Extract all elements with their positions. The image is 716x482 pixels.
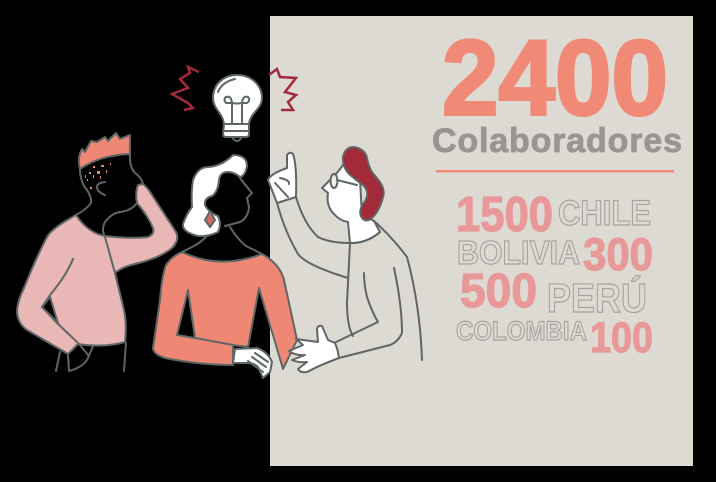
hair [79,133,130,169]
Bolivia count: 300 [583,229,653,280]
Peru label: PERÚ [547,275,647,321]
Chile count: 1500 [456,188,553,242]
hair [343,147,384,220]
fingers [248,353,268,372]
head outline [76,154,143,215]
figure: woman with hair [153,155,297,378]
Colombia label: COLOMBIA [456,316,587,346]
head and neck [322,165,380,243]
open hand [289,326,339,372]
heading rule [436,170,674,172]
total number: 2400 [442,18,668,138]
panel: stats background [270,16,693,466]
hand [233,348,272,378]
stubble dots [85,163,111,189]
arm folds [42,203,137,343]
face and neck [182,178,262,254]
hair [183,155,247,236]
total label: Colaboradores [432,122,682,160]
earring [205,211,215,227]
sleeve line [195,338,233,345]
raised hand [268,153,296,203]
trousers [56,343,126,371]
icon: left spark [172,67,199,110]
Peru count: 500 [460,265,537,318]
sweater [153,252,297,369]
Chile label: CHILE [558,194,651,233]
Colombia count: 100 [590,314,653,362]
raised hand fingers [275,178,289,197]
ear [97,182,105,195]
sweater [17,184,177,354]
glasses [330,174,357,188]
figure: man with hand on head [17,133,177,371]
icon: light bulb [213,75,262,141]
icon: right spark [269,69,296,110]
figure: man with glasses [268,147,422,372]
torso lines [277,197,422,360]
Bolivia label: BOLIVIA [457,234,580,271]
arm gap [177,290,195,338]
arm gap [42,297,58,323]
